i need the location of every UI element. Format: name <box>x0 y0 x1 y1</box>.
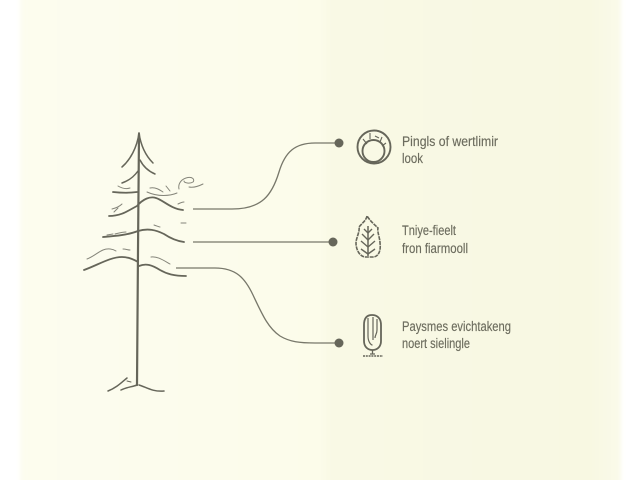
label 3 <box>402 319 511 351</box>
dot 1 <box>334 138 344 148</box>
icon: tree leaf <box>356 216 380 257</box>
connector 1 <box>193 138 344 209</box>
label 2: Tniye-fieelt <box>402 223 456 238</box>
tree roots <box>108 378 164 391</box>
connector 3 <box>176 268 344 348</box>
needle strokes <box>87 177 203 264</box>
label 1: Pingls of wertlimir <box>402 134 498 149</box>
tree top branches <box>122 133 155 183</box>
label 3: Paysmes evichtakeng <box>402 319 511 334</box>
icon: ring <box>358 130 390 164</box>
icon: thermometer <box>363 315 383 356</box>
trunk <box>137 134 139 385</box>
label 3: noert sielingle <box>402 336 470 351</box>
label 1: look <box>402 151 423 166</box>
label 2: fron fiarmooll <box>402 241 468 256</box>
label 2 <box>402 223 468 256</box>
main boughs <box>84 192 186 276</box>
label 1 <box>402 134 498 166</box>
connector 2 <box>193 238 338 246</box>
dot 3 <box>334 338 344 348</box>
tree illustration <box>84 133 203 391</box>
dot 2 <box>328 238 338 246</box>
